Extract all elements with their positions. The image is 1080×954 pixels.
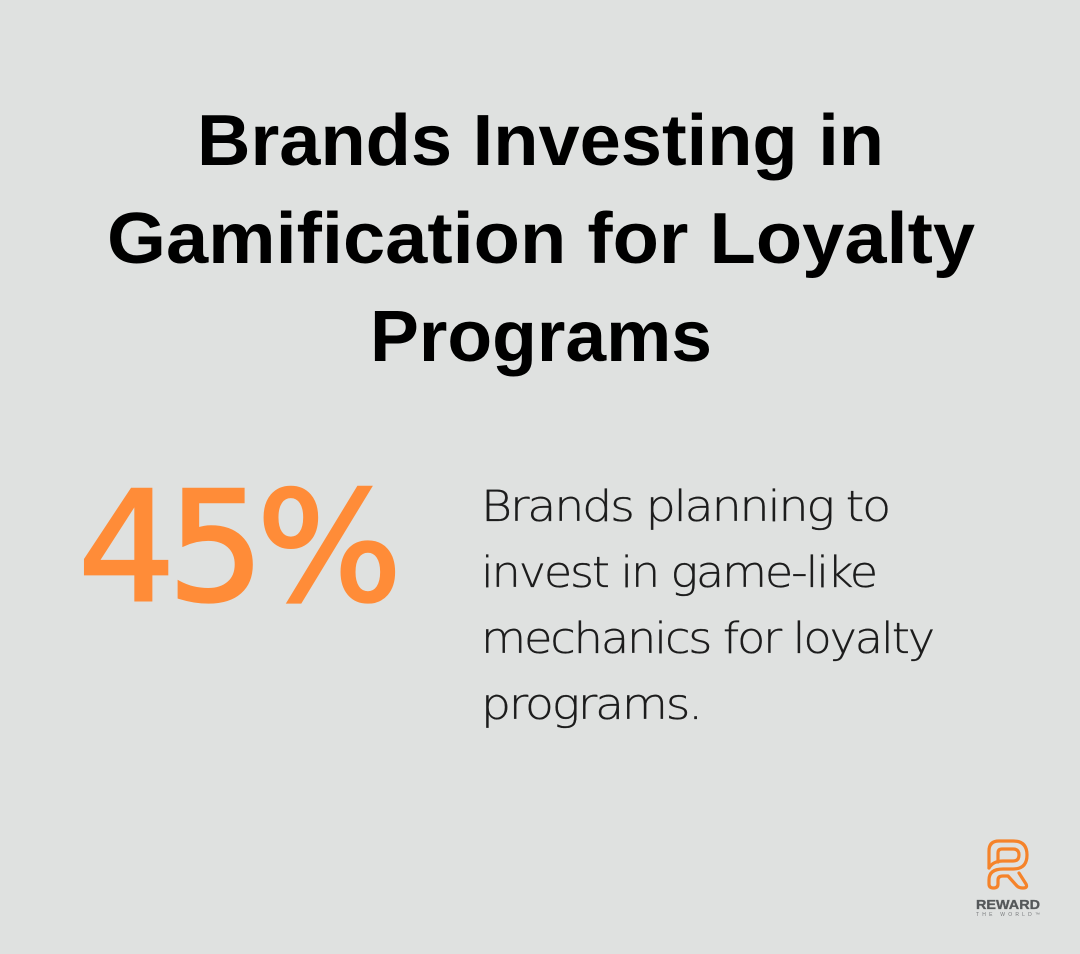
- logo: Reward the World: [976, 841, 1040, 918]
- description text: programs.: [481, 680, 701, 730]
- statistic: 45%: 45%: [78, 459, 395, 636]
- icon: orange R mark: [989, 841, 1027, 888]
- description text: [481, 482, 934, 730]
- logo wordmark: REWARD: [976, 897, 1040, 912]
- title: Gamification for Loyalty: [107, 199, 975, 279]
- logo tagline: THE WORLD™: [976, 912, 1040, 918]
- title: Programs: [370, 297, 712, 377]
- description text: Brands planning to: [481, 482, 889, 532]
- description text: invest in game-like: [481, 548, 876, 598]
- title: Brands Investing in: [197, 101, 884, 181]
- description text: mechanics for loyalty: [481, 614, 934, 664]
- title: [107, 101, 975, 377]
